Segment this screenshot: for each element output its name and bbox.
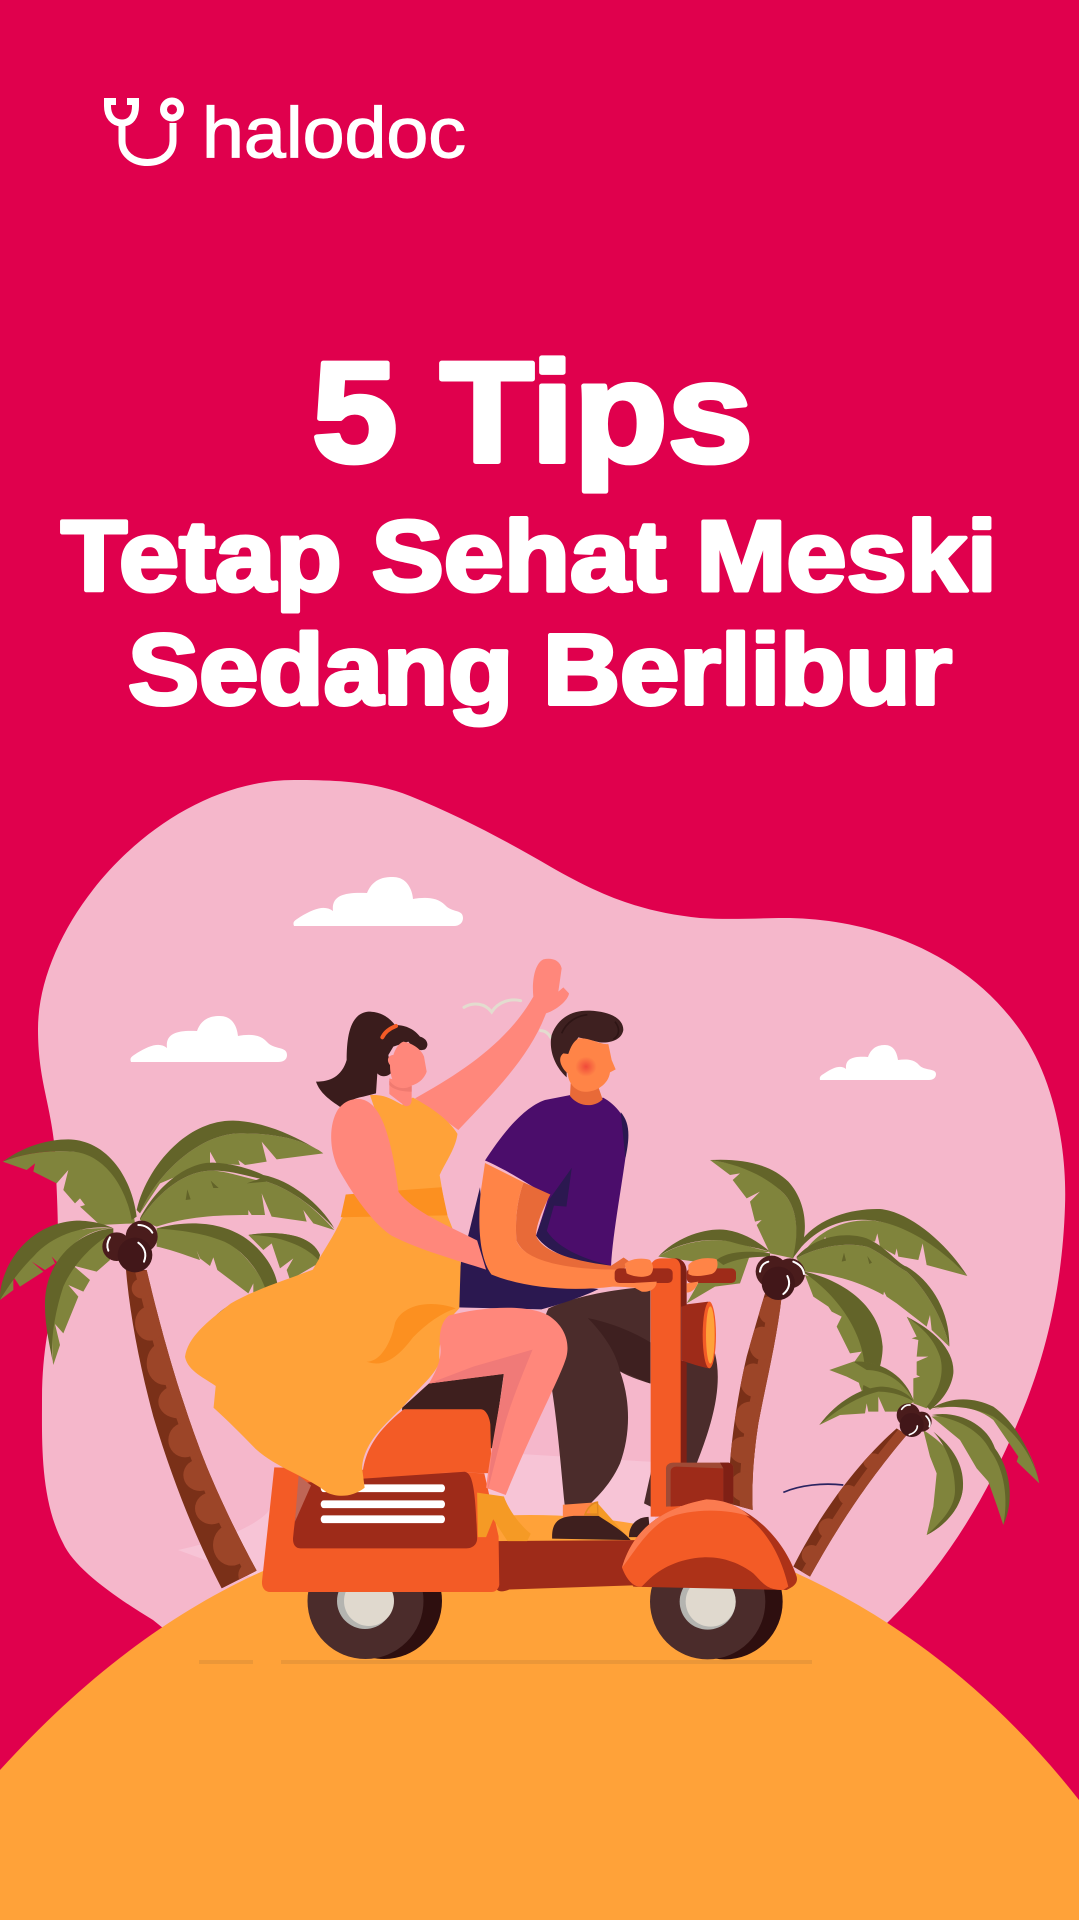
bird bbox=[464, 1000, 551, 1037]
rear wheel bbox=[308, 1543, 442, 1659]
icon: stethoscope bbox=[104, 101, 180, 162]
small palm frond right mid bbox=[932, 1416, 1008, 1525]
scooter upper body bbox=[363, 1409, 491, 1473]
small palm frond up-left bbox=[829, 1362, 914, 1402]
palm left frond hanging bbox=[52, 1233, 110, 1365]
title line 1: 5 Tips bbox=[312, 334, 753, 492]
woman shoulder and arm bbox=[331, 1099, 486, 1270]
palm left frond far left bbox=[0, 1228, 113, 1300]
handlebar bbox=[615, 1268, 736, 1283]
man far leg bbox=[644, 1353, 718, 1507]
palm tree right small bbox=[783, 1317, 1039, 1583]
title bbox=[61, 334, 997, 726]
small palm frond left bbox=[819, 1388, 914, 1425]
palm left trunk bbox=[126, 1270, 257, 1588]
palm right trunk bbox=[730, 1294, 782, 1510]
woman dress fold bbox=[366, 1304, 456, 1364]
ground hill bbox=[0, 1515, 1079, 1920]
pink blob backdrop bbox=[38, 780, 1065, 1670]
front box bbox=[666, 1463, 733, 1507]
woman dress top bbox=[341, 1095, 457, 1219]
palm left frond top left bbox=[3, 1151, 135, 1225]
logo wordmark: halodoc bbox=[202, 94, 466, 174]
palm left frond back right bbox=[248, 1233, 320, 1280]
small palm coconuts bbox=[897, 1403, 932, 1437]
woman head bbox=[382, 1026, 427, 1106]
man neck bbox=[570, 1083, 603, 1105]
small palm trunk bbox=[794, 1428, 906, 1576]
title line 3: Sedang Berlibur bbox=[128, 614, 952, 726]
palm right frond top bbox=[710, 1160, 797, 1258]
palm left frond right lower bbox=[157, 1228, 267, 1293]
cloud right bbox=[820, 1045, 936, 1080]
fender bbox=[622, 1499, 797, 1590]
man hair bbox=[551, 1011, 623, 1077]
palm right frond left bbox=[658, 1240, 770, 1303]
scooter rear and man lower body bbox=[262, 1095, 652, 1592]
woman shoe bbox=[477, 1493, 531, 1541]
man near leg bbox=[543, 1287, 650, 1510]
palm tree left bbox=[0, 1121, 334, 1593]
scooter front assembly bbox=[615, 1258, 797, 1590]
seat bbox=[402, 1373, 504, 1449]
man shirt bbox=[485, 1095, 628, 1266]
woman dress skirt bbox=[185, 1214, 461, 1496]
woman neck bbox=[389, 1078, 412, 1106]
palm left frond top right bbox=[140, 1133, 323, 1213]
palm left coconuts bbox=[102, 1221, 158, 1272]
scooter vent panel bbox=[293, 1472, 477, 1548]
small palm frond right top bbox=[932, 1405, 1039, 1483]
man arm bbox=[479, 1163, 657, 1289]
man head and woman arm and hair bbox=[316, 959, 623, 1130]
woman hair band bbox=[382, 1026, 396, 1037]
palm right frond long bbox=[797, 1245, 949, 1347]
headlamp bbox=[682, 1302, 716, 1368]
small palm frond up bbox=[907, 1317, 943, 1408]
cloud top bbox=[293, 877, 463, 926]
palm left frond mid right bbox=[140, 1171, 334, 1230]
hands bbox=[625, 1258, 718, 1293]
scooter connecting floor bbox=[497, 1540, 652, 1591]
woman hair bbox=[316, 1012, 427, 1107]
man face bbox=[560, 1038, 616, 1092]
small palm frond lower bbox=[923, 1430, 963, 1535]
palm right frond upper right bbox=[803, 1220, 967, 1276]
logo: halodoc bbox=[104, 94, 466, 174]
light sand band behind scooter bbox=[178, 1454, 655, 1580]
palm tree right big bbox=[658, 1160, 967, 1520]
woman body and dress bbox=[185, 1095, 568, 1541]
blue distant line bbox=[783, 1484, 843, 1492]
man lower shirt bbox=[457, 1187, 599, 1309]
scooter lower body bbox=[262, 1467, 499, 1592]
cloud left bbox=[130, 1016, 287, 1062]
palm right coconuts bbox=[756, 1256, 805, 1300]
palm right frond drooping bbox=[805, 1275, 871, 1403]
woman face bbox=[388, 1042, 427, 1087]
column bbox=[651, 1258, 687, 1517]
woman leg bbox=[429, 1308, 568, 1495]
title line 2: Tetap Sehat Meski bbox=[61, 500, 997, 612]
front wheel bbox=[650, 1544, 783, 1659]
woman dress belt bbox=[341, 1187, 447, 1217]
road shadow lines bbox=[199, 1660, 812, 1664]
man shoes bbox=[552, 1502, 650, 1540]
woman raised arm bbox=[415, 959, 569, 1130]
